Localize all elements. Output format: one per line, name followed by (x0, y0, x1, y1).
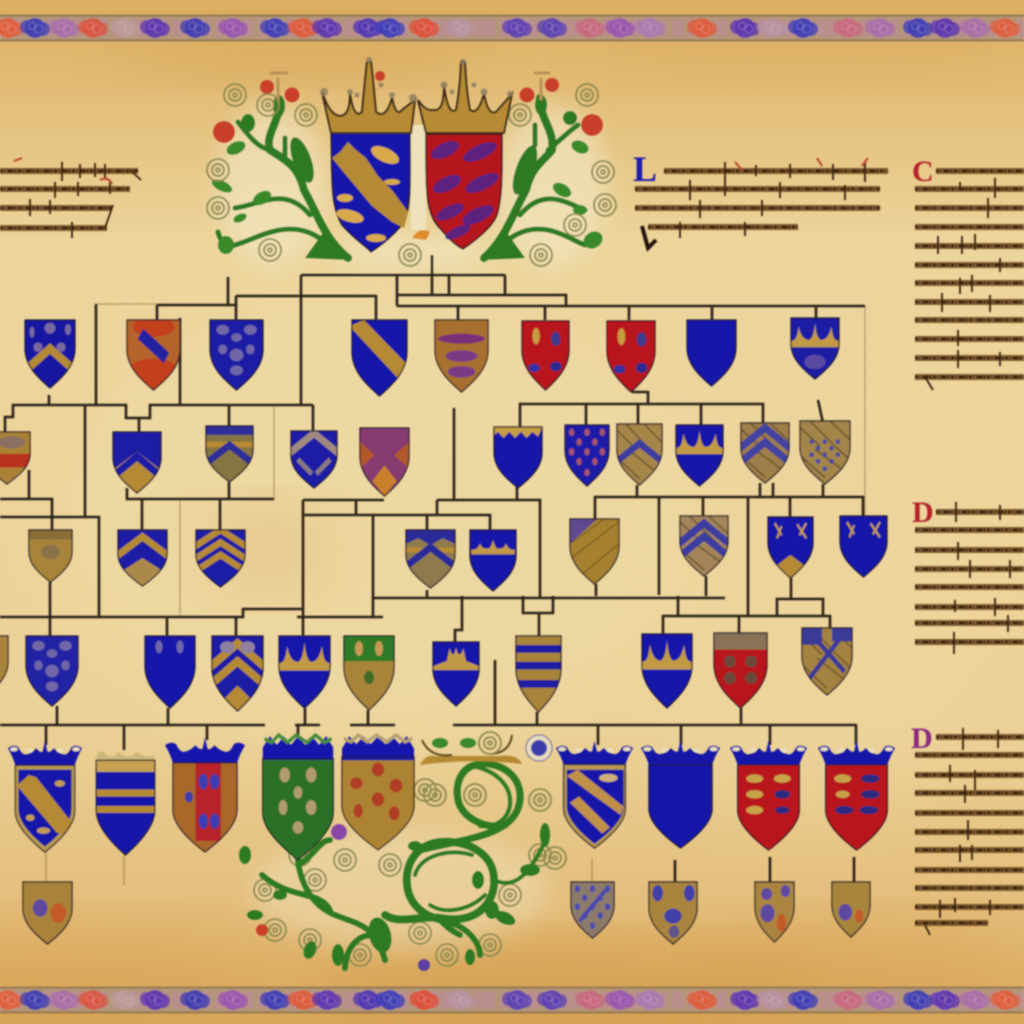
shield 1-1 blue chevron (22, 320, 78, 388)
initial L: L (633, 149, 657, 189)
shield 3-6 half blue gold (570, 519, 619, 584)
crowned shield 5-8 red gold (730, 741, 807, 850)
crest shield blue with crown (320, 57, 417, 252)
upper left manuscript text block (0, 158, 141, 238)
shield 1-6 red (522, 321, 569, 390)
shield 4-1 partial tan (0, 636, 8, 698)
shield 2-4 blue tan saltire (289, 431, 339, 488)
right text block C (912, 155, 1024, 390)
shield 2-9 blue crown (676, 425, 723, 486)
upper crest: vines and halo (207, 73, 616, 268)
shield 1-5 brown purple (435, 320, 488, 392)
shield 2-11 tan blue (800, 421, 850, 484)
blue crest crown (322, 62, 415, 133)
crowned shield 5-2 blue gold stripes (89, 752, 162, 855)
shield 4-8 tan blue stripes (516, 636, 561, 712)
shield 1-8 plain blue (687, 320, 736, 386)
row 4 shields (0, 628, 852, 712)
shield 6-4 tan (755, 882, 794, 942)
shield 2-8 tan chevrons (615, 424, 664, 485)
shield 2-5 purple lozenges (360, 428, 409, 496)
shield 4-5 blue gold crown (279, 636, 330, 708)
shield 2-1 partial tan and red (0, 432, 30, 484)
shield 4-7 blue gold band (433, 642, 479, 706)
shield 3-2 blue gold chevron (116, 530, 169, 586)
crowned shield 5-4 green (263, 735, 333, 860)
crowned shield 5-7 plain blue (641, 741, 720, 848)
shield 1-2 red bend (124, 317, 183, 394)
shield 2-10 tan chevrons (739, 423, 791, 483)
shield 2-2 blue gold chevron (111, 432, 163, 493)
shield 4-3 blue (145, 636, 195, 708)
row 1 shields (22, 317, 839, 396)
crest text block with blue initial (633, 149, 888, 248)
right text block D lower (911, 722, 1024, 935)
shield 3-3 blue chevrons (194, 530, 247, 587)
shield 6-3 tan blue (649, 882, 697, 944)
row 2 shields (0, 421, 850, 496)
red crest crown (418, 62, 512, 133)
shield 4-4 blue gold chevrons (209, 636, 266, 711)
shield 1-7 red (607, 321, 655, 392)
shield 4-11 tan blue cross (802, 628, 852, 695)
crowned shield 5-1 blue gold bend (8, 741, 82, 852)
shield 4-10 red tan chief (714, 633, 767, 708)
shield 3-1 tan (29, 530, 72, 582)
shield 1-4 blue gold bend (349, 320, 410, 396)
shield 4-2 blue charged (26, 636, 78, 706)
left vine (207, 73, 350, 261)
shield 3-5 blue gold crown (470, 530, 516, 591)
right vine (399, 73, 616, 266)
shield 2-7 blue dotted (565, 425, 609, 486)
shield 3-4 tan blue (404, 530, 457, 588)
initial C: C (912, 155, 934, 188)
row 6 small shields (23, 882, 870, 944)
bottom flourish: green vines and spirals (239, 732, 566, 971)
shield 6-5 tan (832, 882, 870, 937)
shield 1-9 blue crown (791, 318, 839, 379)
initial D purple: D (911, 722, 933, 755)
shield 2-6 blue gold top (494, 427, 542, 488)
shield 1-3 blue charged (210, 320, 263, 390)
row 5 crowned shields (8, 735, 895, 860)
row 3 shields (29, 516, 887, 591)
top decorative border (0, 16, 1024, 40)
initial D: D (912, 496, 934, 529)
bottom decorative border (0, 988, 1024, 1012)
crowned shield 5-6 blue gold bends (556, 741, 633, 848)
shield 6-2 blue tan (571, 882, 614, 938)
shield 2-3 tan stripes (204, 426, 255, 482)
shield 3-7 tan chevron (678, 516, 730, 576)
shield 4-9 blue gold crown (642, 634, 692, 708)
gold banner with vine (420, 732, 552, 765)
shield 3-8 blue gold tip (768, 517, 813, 578)
shield 3-9 blue gold birds (840, 516, 887, 577)
large S-shaped vine (239, 764, 550, 971)
right text block D (912, 496, 1024, 654)
crowned shield 5-5 tan (342, 735, 414, 850)
crowned shield 5-9 red blue (818, 741, 895, 850)
crest shield red with crown (412, 59, 513, 249)
shield 6-1 tan (23, 882, 72, 944)
family tree connector lines (0, 255, 865, 885)
shield 4-6 green and tan (344, 636, 394, 710)
crowned shield 5-3 red and tan (165, 738, 245, 852)
